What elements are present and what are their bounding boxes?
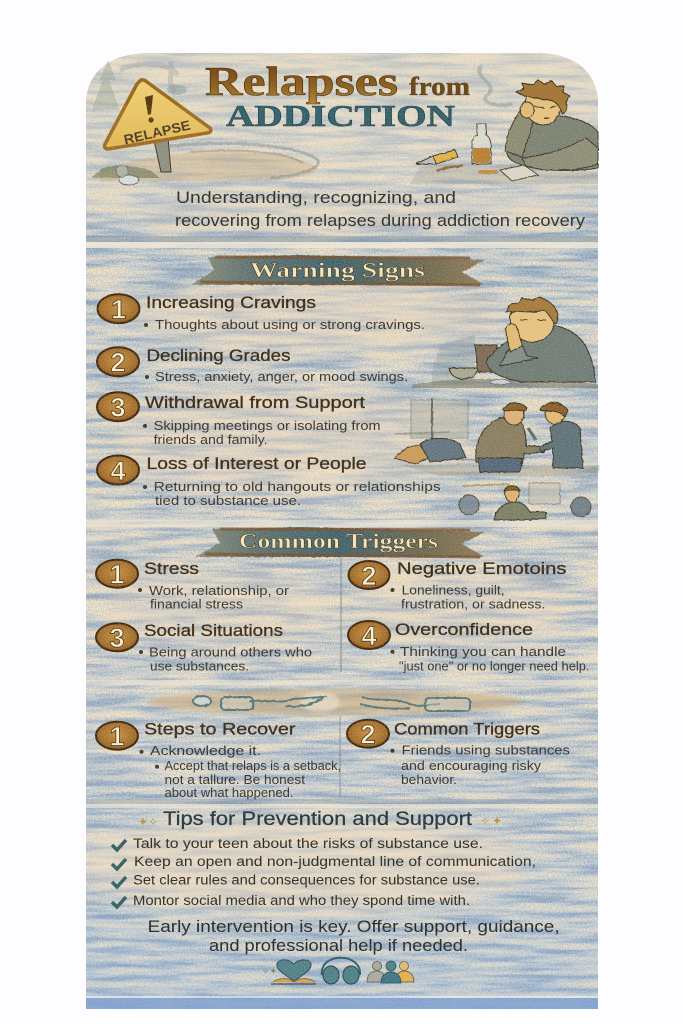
icon: relapse warning sign <box>105 80 211 172</box>
warning sign 3: Skipping meetings or isolating from <box>154 419 381 433</box>
warning sign 4: Loss of Interest or People <box>146 455 366 473</box>
recovery 1: steps to recover: Accept that relaps is a setback, <box>164 759 341 773</box>
warning sign 4: 4 <box>110 456 126 486</box>
title: ADDICTION <box>226 98 455 133</box>
banner heading: Common Triggers: Common Triggers <box>239 529 438 553</box>
trigger 4: overconfidence <box>348 621 590 673</box>
header illustration: winding path and ground <box>92 60 318 185</box>
subtitle: recovering from relapses during addiction recovery <box>175 211 586 230</box>
warning sign 3: 3 <box>110 392 126 422</box>
trigger 2: negative emotions: Negative Emotoins <box>397 560 566 578</box>
trigger 1: stress: 1 <box>109 560 125 590</box>
trigger 3: social situations: Being around others who <box>149 646 312 660</box>
warning sign 4 <box>97 455 441 508</box>
recovery 1: steps to recover: 1 <box>109 722 125 752</box>
trigger 2: negative emotions: Loneliness, guilt, <box>402 584 505 598</box>
warning sign 1: 1 <box>111 294 126 324</box>
icon: sparkle stars left: ✦✧ <box>138 815 158 829</box>
subtitle: Understanding, recognizing, and <box>176 188 456 207</box>
illustration: teen with old friends <box>459 483 591 520</box>
warning sign 3 <box>97 392 381 447</box>
icon: group of people <box>367 961 414 983</box>
warning sign 1: Thoughts about using or strong cravings. <box>155 318 425 332</box>
divider: recovery <box>339 717 341 798</box>
trigger 1: stress: Work, relationship, or <box>149 584 289 598</box>
title <box>205 58 470 133</box>
warning sign 2: Declining Grades <box>146 347 290 365</box>
trigger 2: negative emotions: 2 <box>361 561 377 591</box>
banner heading: Common Triggers <box>195 527 485 557</box>
recovery 2: common triggers: Friends using substances <box>402 744 570 758</box>
tips checklist <box>112 836 536 908</box>
recovery 1: steps to recover: about what happened. <box>164 786 294 800</box>
tip 2: Keep an open and non-judgmental line of communication, <box>134 854 536 869</box>
warning sign 4: tied to substance use. <box>155 494 301 508</box>
warning sign 1: Increasing Cravings <box>146 294 316 312</box>
left chain <box>193 696 324 710</box>
recovery 1: steps to recover: not a tallure. Be honest <box>164 773 306 787</box>
recovery 2: common triggers: Common Triggers <box>394 720 540 738</box>
recovery 2: common triggers: and encouraging risky <box>401 759 542 773</box>
warning sign 2: 2 <box>110 348 126 378</box>
trigger 3: social situations: 3 <box>109 623 125 653</box>
banner: broken chain <box>147 689 523 715</box>
trigger 1: stress: financial stress <box>150 598 243 612</box>
warning sign 1 <box>98 294 425 332</box>
trigger 4: overconfidence: "just one" or no longer need help. <box>399 659 590 673</box>
title: Relapses <box>205 58 398 104</box>
icon: sparkle stars right: ✧✦ <box>480 814 502 828</box>
tip 1: Talk to your teen about the risks of substance use. <box>133 836 483 851</box>
illustration: two teens, bag and notice board <box>394 398 600 476</box>
trigger 3: social situations: use substances. <box>150 660 249 674</box>
banner heading: Warning Signs <box>191 255 485 285</box>
trigger 4: overconfidence: Overconfidence <box>395 621 533 639</box>
closing message: Early intervention is key. Offer support, guidance, <box>148 917 560 936</box>
warning sign 4: Returning to old hangouts or relationships <box>154 480 441 494</box>
recovery 2: common triggers: 2 <box>360 720 376 750</box>
recovery 2: common triggers: behavior. <box>401 773 457 787</box>
icon: headphones <box>322 958 360 984</box>
icon: heart on open book <box>262 960 316 984</box>
trigger 3: social situations <box>96 622 312 674</box>
banner heading: Warning Signs: Warning Signs <box>250 258 425 282</box>
pen <box>416 150 458 164</box>
panel: textured poster <box>80 53 598 1009</box>
tip 3: Set clear rules and consequences for substance use. <box>133 872 480 888</box>
illustration: man with head in hand, bottle and pen <box>410 66 598 184</box>
sign label: RELAPSE <box>122 118 192 147</box>
trigger 1: stress: Stress <box>144 560 199 578</box>
right chain <box>360 697 470 711</box>
warning sign 3: Withdrawal from Support <box>145 394 365 412</box>
tips heading: Tips for Prevention and Support <box>163 809 473 830</box>
trigger 2: negative emotions <box>348 560 566 612</box>
closing message: and professional help if needed. <box>209 936 468 955</box>
recovery 1: steps to recover: Acknowledge it. <box>150 744 261 758</box>
icon: heart on open book: ✧✦ <box>262 966 278 976</box>
divider: triggers <box>340 558 342 672</box>
warning sign 2 <box>97 347 408 384</box>
trigger 2: negative emotions: frustration, or sadness. <box>401 598 546 612</box>
recovery 1: steps to recover <box>96 720 341 800</box>
trigger 4: overconfidence: Thinking you can handle <box>400 645 566 659</box>
tip 4: Montor social media and who they spond time with. <box>133 893 470 908</box>
recovery 1: steps to recover: Steps to Recover <box>144 720 296 738</box>
warning sign 3: friends and family. <box>154 433 268 447</box>
subtitle <box>175 188 586 230</box>
recovery 2: common triggers <box>347 720 570 787</box>
bottle <box>472 124 491 164</box>
warning sign 2: Stress, anxiety, anger, or mood swings. <box>155 370 408 384</box>
closing message <box>148 917 560 955</box>
exclamation mark <box>145 95 153 115</box>
man body <box>507 116 598 170</box>
man head <box>525 85 561 125</box>
title: from <box>409 72 470 101</box>
trigger 4: overconfidence: 4 <box>361 621 377 651</box>
trigger 1: stress <box>96 560 289 612</box>
illustration: tired boy at table <box>412 297 598 388</box>
trigger 3: social situations: Social Situations <box>144 622 283 640</box>
